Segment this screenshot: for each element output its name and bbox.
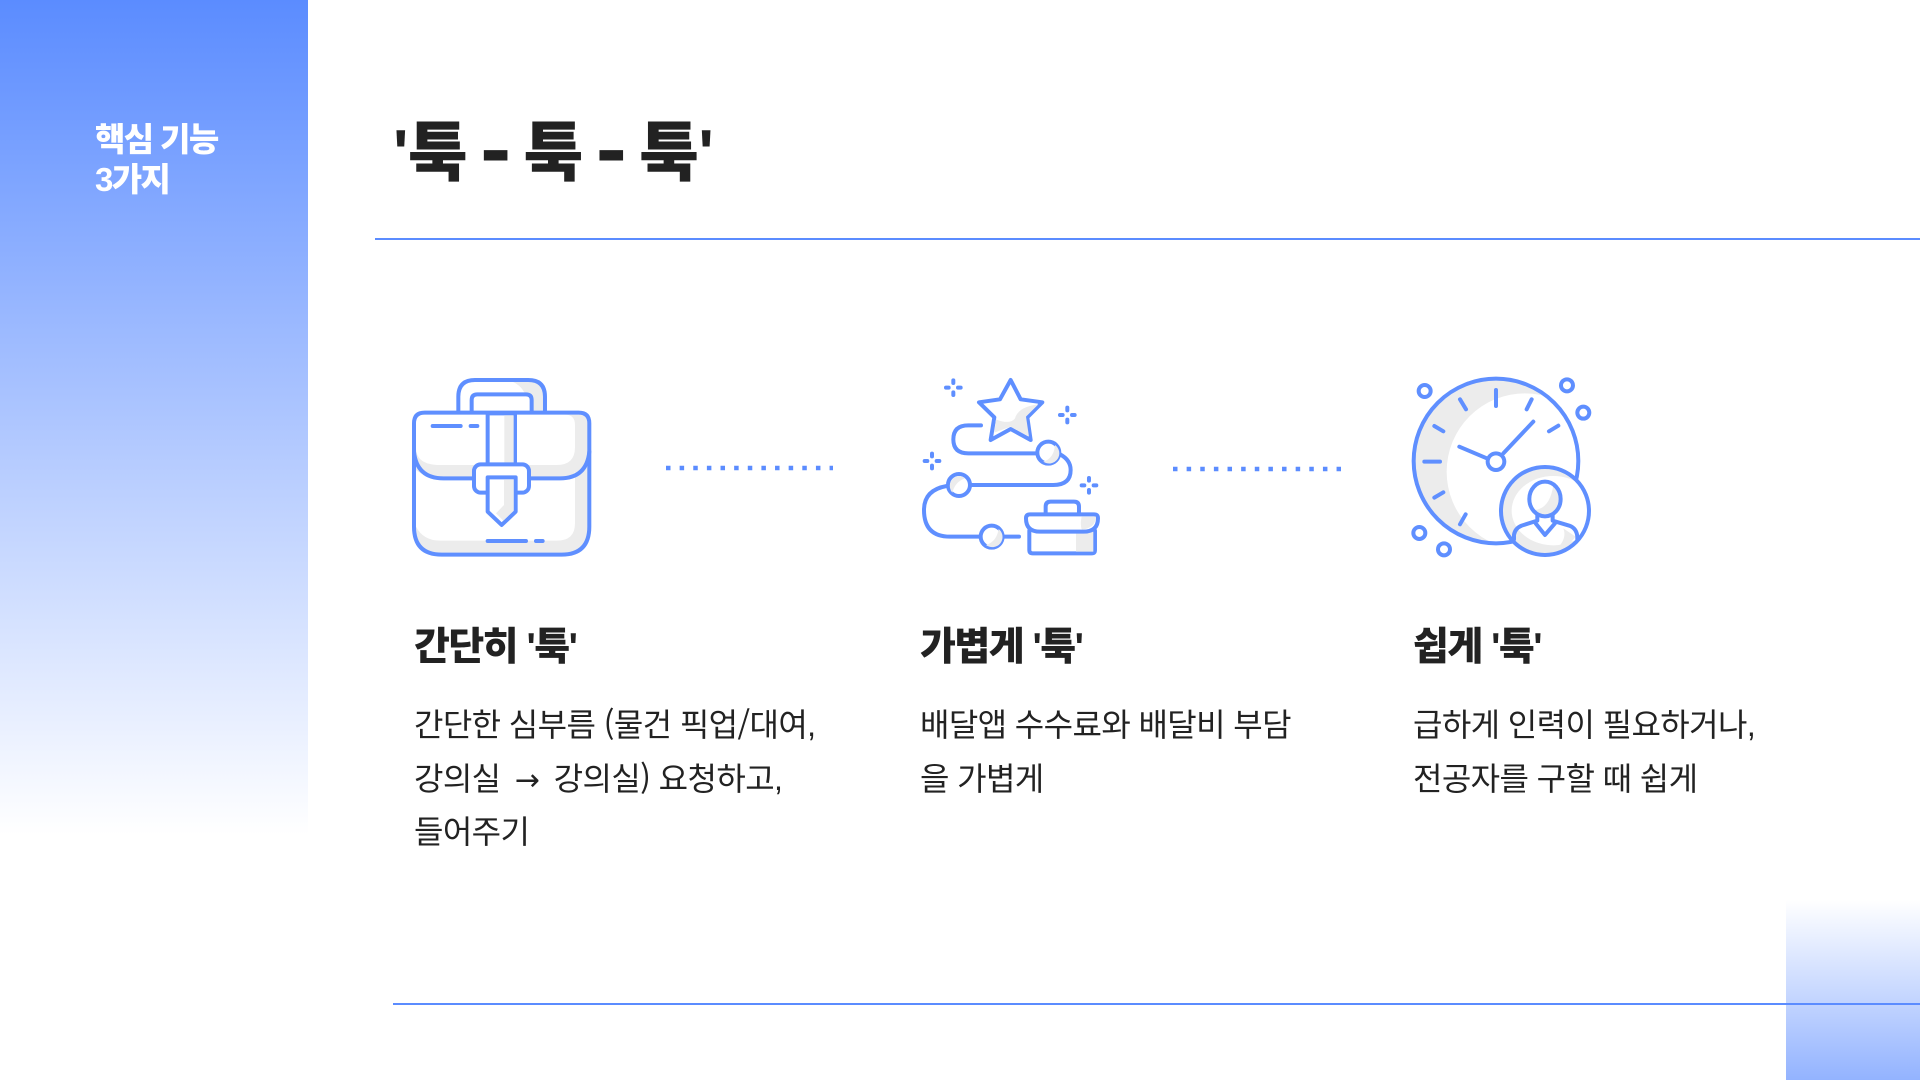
sidebar heading: 핵심 기능 [95,121,218,158]
text: feature 2 description: 배달앱 수수료와 배달비 부담 [920,707,1291,743]
text: feature 1 description: 간단한 심부름 (물건 픽업/대여, [414,700,815,746]
panel: left gradient sidebar [0,0,308,835]
text: feature 1 description [414,700,815,850]
bottom divider line [393,1003,1920,1005]
heading: feature 2: 가볍게 '툭' [920,626,1082,669]
heading: feature 1: 간단히 '툭' [414,626,576,669]
text: feature 1 description: 들어주기 [414,814,529,850]
icon: clock with person [1411,376,1592,558]
text: feature 2 description: 을 가볍게 [920,761,1044,797]
heading: feature 3: 쉽게 '툭' [1413,626,1541,669]
text: feature 3 description: 전공자를 구할 때 쉽게 [1413,761,1697,797]
panel: bottom right gradient block [1786,900,1920,1080]
top divider line [375,238,1920,240]
text: feature 3 description: 급하게 인력이 필요하거나, [1413,707,1755,743]
text: feature 2 description [920,707,1291,797]
text: feature 3 description [1413,707,1755,797]
sidebar heading: 3가지 [95,160,169,198]
sidebar heading [95,121,218,198]
text: feature 1 description: 강의실 → 강의실) 요청하고, [414,754,782,800]
title: '툭 - 툭 - 툭' [393,91,713,211]
